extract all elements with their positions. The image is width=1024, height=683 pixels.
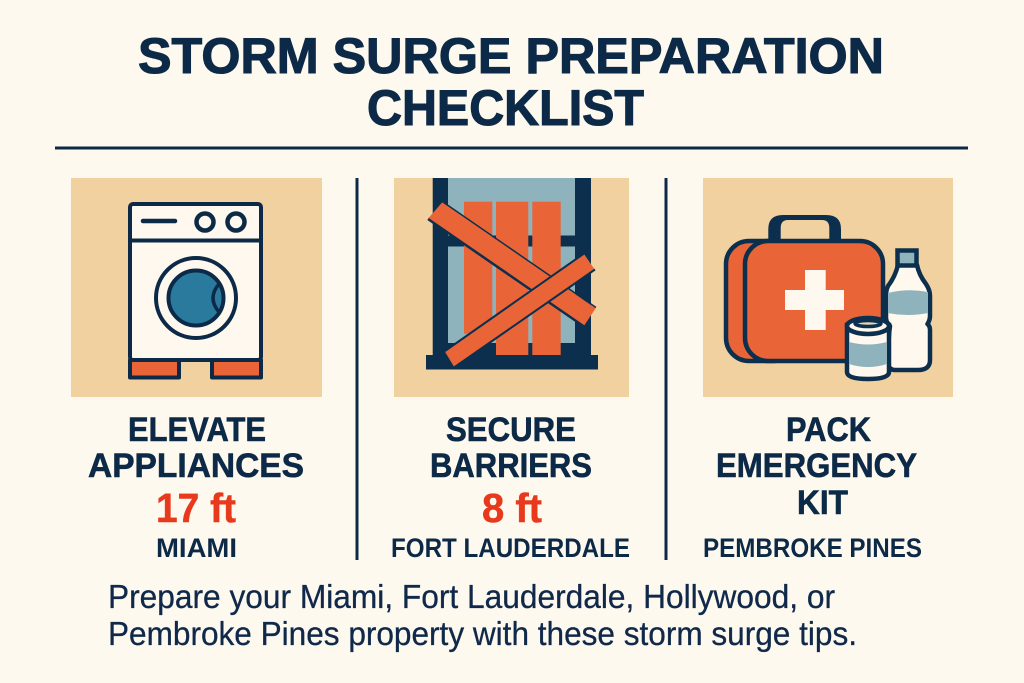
heading: elevate appliances: APPLIANCES [88, 447, 304, 485]
heading: secure barriers: SECURE [446, 411, 576, 449]
heading: elevate appliances: ELEVATE [128, 411, 266, 449]
panel: secure barriers [391, 178, 630, 563]
footer text [108, 578, 857, 652]
city: Fort Lauderdale: FORT LAUDERDALE [391, 533, 630, 563]
heading: pack emergency kit: PACK [786, 411, 871, 449]
title: CHECKLIST [367, 80, 644, 136]
title [138, 28, 884, 136]
number: 8 ft: 8 ft [482, 485, 542, 531]
heading: pack emergency kit: EMERGENCY [716, 447, 917, 485]
icon panel: washing machine [71, 178, 322, 397]
panel: elevate appliances [71, 178, 322, 563]
heading: pack emergency kit [716, 411, 917, 522]
title: STORM SURGE PREPARATION [138, 28, 884, 84]
heading: secure barriers: BARRIERS [430, 447, 592, 485]
number: 17 ft: 17 ft [156, 485, 236, 531]
heading: pack emergency kit: KIT [797, 484, 848, 522]
heading: secure barriers [430, 411, 592, 485]
icon: water bottle [886, 250, 930, 370]
icon: food can [847, 318, 889, 379]
footer text: Pembroke Pines property with these storm surge tips. [108, 615, 857, 652]
panel: pack emergency kit [703, 178, 953, 563]
city: Pembroke Pines: PEMBROKE PINES [703, 533, 922, 563]
city: Miami: MIAMI [156, 533, 237, 563]
heading: elevate appliances [88, 411, 304, 485]
icon panel: boarded window [394, 178, 629, 397]
icon panel: first aid kit and supplies [703, 178, 953, 397]
footer text: Prepare your Miami, Fort Lauderdale, Hollywood, or [108, 578, 835, 615]
